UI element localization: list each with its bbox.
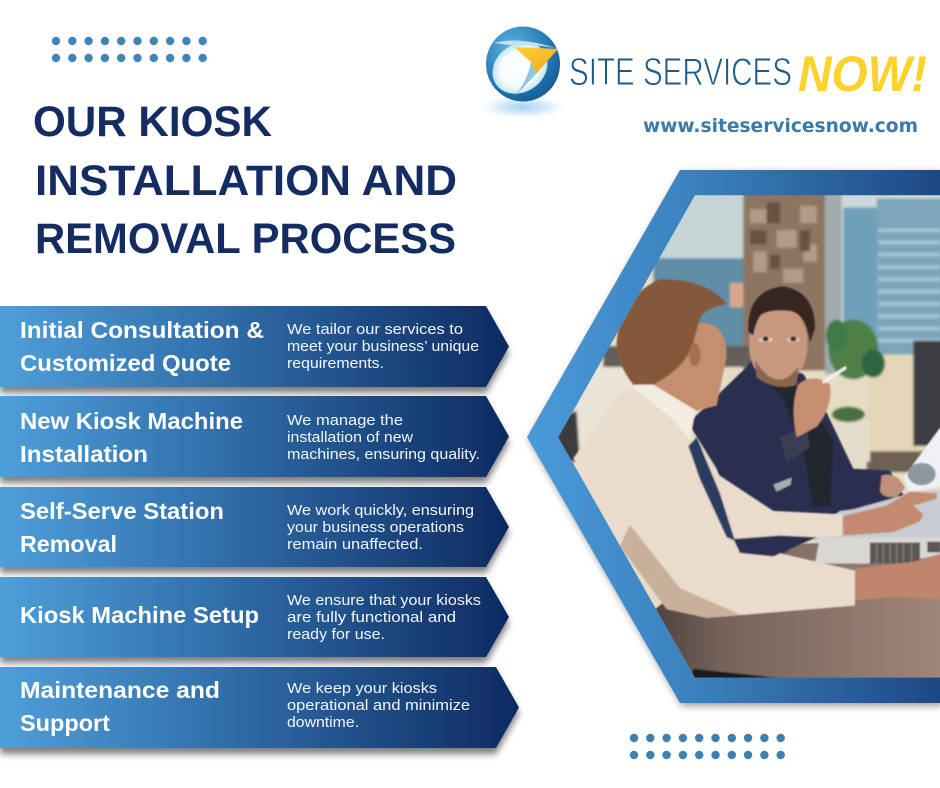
banner 2 heading: New Kiosk Machine bbox=[20, 408, 243, 434]
banner 3 description: your business operations bbox=[287, 520, 464, 536]
logo globe icon bbox=[481, 26, 565, 118]
banner 5 description: downtime. bbox=[287, 715, 359, 731]
banner 3 description bbox=[287, 503, 474, 553]
banner 2 description: machines, ensuring quality. bbox=[287, 447, 480, 463]
banner 1 heading bbox=[20, 317, 264, 376]
banner 1 arrow bbox=[0, 306, 509, 387]
banner 2 heading bbox=[20, 408, 243, 467]
banner 5 description bbox=[287, 681, 470, 731]
banner 4: kiosk machine setup bbox=[0, 577, 509, 657]
banner 3 heading: Self-Serve Station bbox=[20, 498, 224, 524]
title: INSTALLATION AND bbox=[35, 157, 457, 205]
banner 2: new kiosk machine installation bbox=[0, 396, 509, 477]
banner 3 description: remain unaffected. bbox=[287, 537, 423, 553]
photo background bbox=[553, 192, 940, 683]
banner 4 description: ready for use. bbox=[287, 627, 385, 643]
banner 2 arrow bbox=[0, 396, 509, 477]
banner 1 description: We tailor our services to bbox=[287, 322, 463, 338]
banner 1 heading: Initial Consultation & bbox=[20, 317, 264, 343]
banner 2 description bbox=[287, 413, 480, 463]
logo: Site Services Now bbox=[481, 26, 927, 118]
banner 5 heading bbox=[20, 677, 220, 736]
banner 5 description: operational and minimize bbox=[287, 698, 470, 714]
banner 5: maintenance and support bbox=[0, 667, 519, 748]
banner 3 heading bbox=[20, 498, 224, 557]
logo NOW!: NOW! bbox=[798, 46, 927, 102]
banner 4 description: We ensure that your kiosks bbox=[287, 593, 481, 609]
banner 1 description: requirements. bbox=[287, 356, 384, 372]
decorative dots: top left bbox=[52, 37, 207, 62]
banner 3 heading: Removal bbox=[20, 531, 117, 557]
photo: man in dark suit bbox=[688, 286, 905, 557]
banner 1 description: meet your business’ unique bbox=[287, 339, 479, 355]
banner 4 description bbox=[287, 593, 481, 643]
banner 1 heading: Customized Quote bbox=[20, 350, 231, 376]
banner 3: self-serve station removal bbox=[0, 487, 509, 567]
banner 5 heading: Support bbox=[20, 710, 110, 736]
banner 1: initial consultation bbox=[0, 306, 509, 387]
banner 2 heading: Installation bbox=[20, 441, 148, 467]
banner 5 arrow bbox=[0, 667, 519, 748]
title: OUR KIOSK bbox=[33, 98, 272, 146]
title bbox=[33, 98, 457, 263]
banner 4 heading: Kiosk Machine Setup bbox=[20, 602, 259, 628]
title: REMOVAL PROCESS bbox=[35, 215, 456, 263]
banner 4 description: are fully functional and bbox=[287, 610, 456, 626]
banner 1 description bbox=[287, 322, 479, 372]
hexagon photo frame bbox=[527, 170, 940, 703]
banner 5 heading: Maintenance and bbox=[20, 677, 220, 703]
banner 3 description: We work quickly, ensuring bbox=[287, 503, 474, 519]
logo wordmark: SITE SERVICES bbox=[569, 51, 792, 94]
photo: table bbox=[647, 423, 940, 679]
photo: man in white shirt bbox=[573, 279, 940, 618]
banner 2 description: installation of new bbox=[287, 430, 414, 446]
banner 2 description: We manage the bbox=[287, 413, 403, 429]
banner 4 arrow bbox=[0, 577, 509, 657]
website url: www.siteservicesnow.com bbox=[643, 115, 918, 137]
banner 3 arrow bbox=[0, 487, 509, 567]
photo: two businessmen in a meeting bbox=[553, 192, 940, 683]
banner 5 description: We keep your kiosks bbox=[287, 681, 437, 697]
decorative dots: bottom right bbox=[630, 734, 785, 759]
